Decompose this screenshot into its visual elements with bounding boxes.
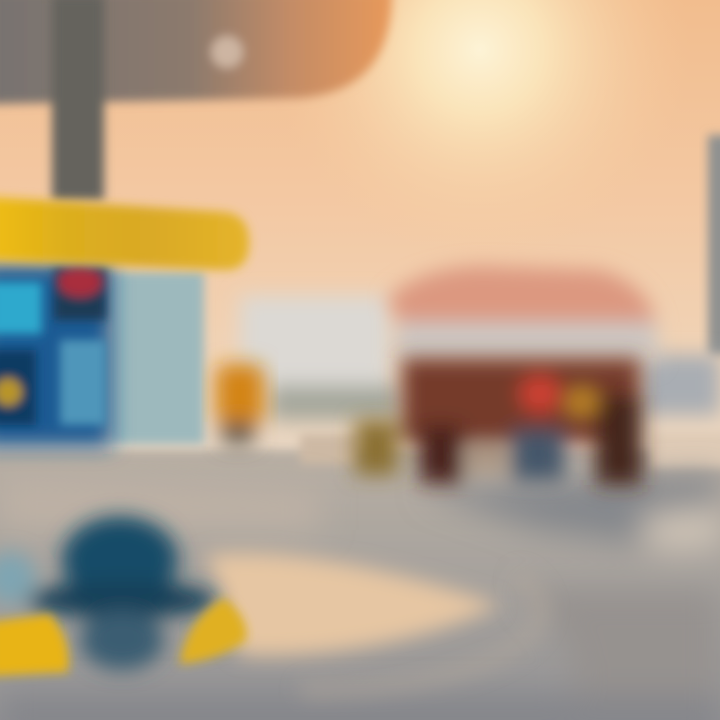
- pole: [52, 0, 104, 200]
- pump light column: [110, 272, 204, 444]
- ground shading bands: [0, 475, 720, 720]
- distant white buildings: [240, 296, 720, 420]
- distant tower: [708, 135, 720, 355]
- canopy: [0, 0, 392, 104]
- yellow fascia band: [0, 197, 249, 270]
- pump details: [0, 267, 106, 425]
- ground curve ring: [300, 575, 541, 690]
- blue dome object: [0, 516, 217, 670]
- orange bollard: [216, 364, 264, 444]
- yellow blobs: [0, 598, 247, 676]
- tanker truck: [355, 266, 657, 485]
- station pump: [0, 197, 249, 447]
- puddle reflection: [205, 553, 500, 656]
- sky: [0, 0, 720, 470]
- pump blue body: [0, 265, 112, 447]
- truck top: [388, 266, 657, 364]
- sun glow: [270, 0, 690, 260]
- ground: [0, 432, 720, 720]
- truck body: [355, 358, 642, 485]
